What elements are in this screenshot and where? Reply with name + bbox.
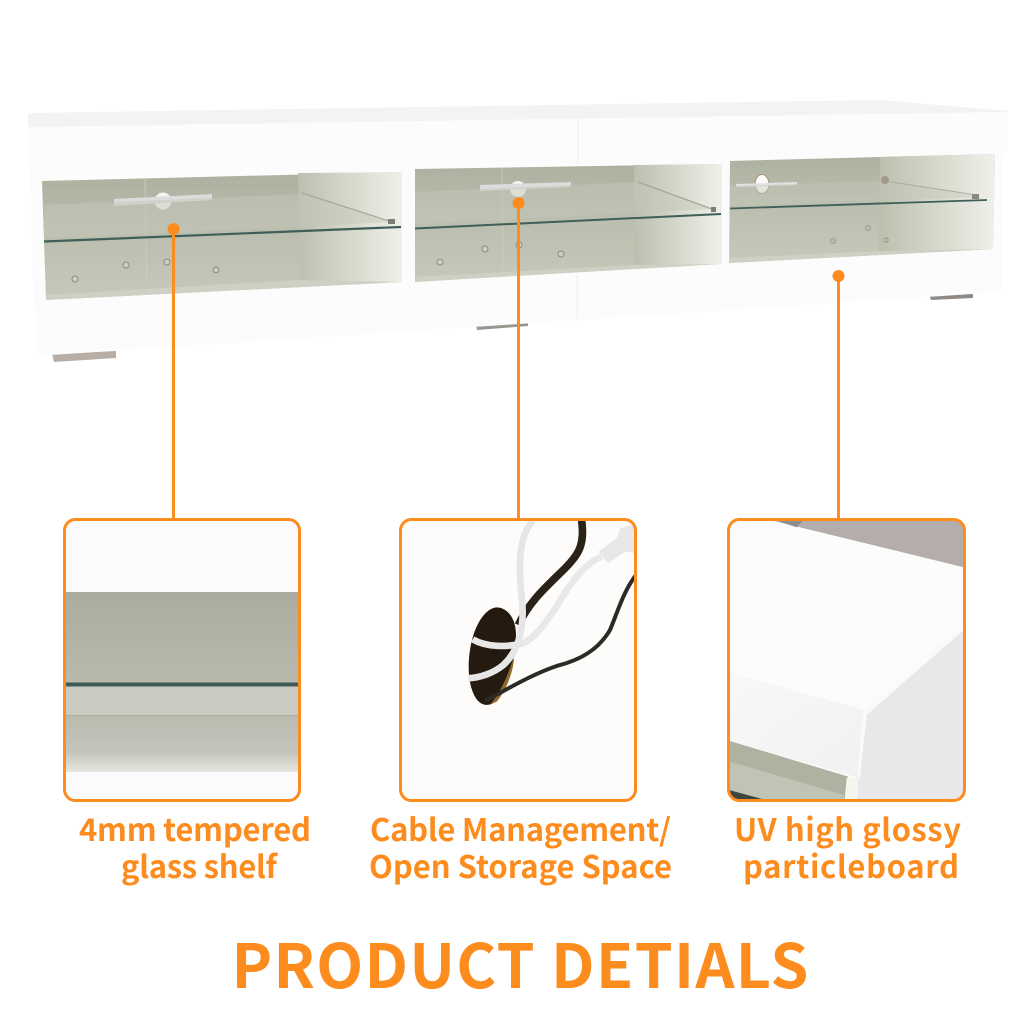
caption: cable management: Cable Management/ xyxy=(370,805,671,850)
shelf below xyxy=(730,741,848,799)
front panel seams xyxy=(577,118,578,318)
front edge xyxy=(730,705,863,777)
stand feet xyxy=(52,292,973,362)
right compartment xyxy=(729,154,995,263)
shelf pins xyxy=(830,226,888,244)
caption: glass shelf xyxy=(79,805,311,887)
black cables xyxy=(518,521,583,625)
shelf pins xyxy=(72,259,219,282)
glass shelf xyxy=(730,176,987,208)
cable hole xyxy=(469,607,516,705)
stand carcass xyxy=(28,110,1008,356)
glass shelf xyxy=(44,193,401,242)
caption: cable management: Open Storage Space xyxy=(369,842,672,887)
panel: glass shelf detail xyxy=(64,519,301,802)
caption: particleboard xyxy=(734,805,961,887)
plug xyxy=(598,525,634,564)
leader line: particleboard xyxy=(832,270,844,519)
panel: cable management detail xyxy=(400,519,637,802)
caption: particleboard: particleboard xyxy=(743,842,959,887)
product photo: white TV stand xyxy=(28,100,1008,362)
title: PRODUCT DETIALS xyxy=(232,917,808,1006)
panel: glossy board detail xyxy=(727,519,967,803)
leader line: glass shelf xyxy=(168,223,180,519)
side panel xyxy=(857,627,967,803)
caption: glass shelf: glass shelf xyxy=(121,842,278,887)
middle compartment xyxy=(415,164,722,282)
stand top surface xyxy=(28,100,1008,127)
caption: glass shelf: 4mm tempered xyxy=(79,805,311,850)
shelf pins xyxy=(437,242,564,265)
cable hole and bar xyxy=(480,181,571,197)
cable hole and bar xyxy=(736,174,797,194)
caption: particleboard: UV high glossy xyxy=(734,805,961,850)
background floor xyxy=(770,520,967,568)
leader line: cable management xyxy=(512,197,524,519)
white cables xyxy=(468,521,533,678)
left compartment xyxy=(42,172,402,300)
glass shelf xyxy=(415,182,721,228)
caption: cable management xyxy=(369,805,672,887)
cable hole and bar xyxy=(114,192,212,210)
